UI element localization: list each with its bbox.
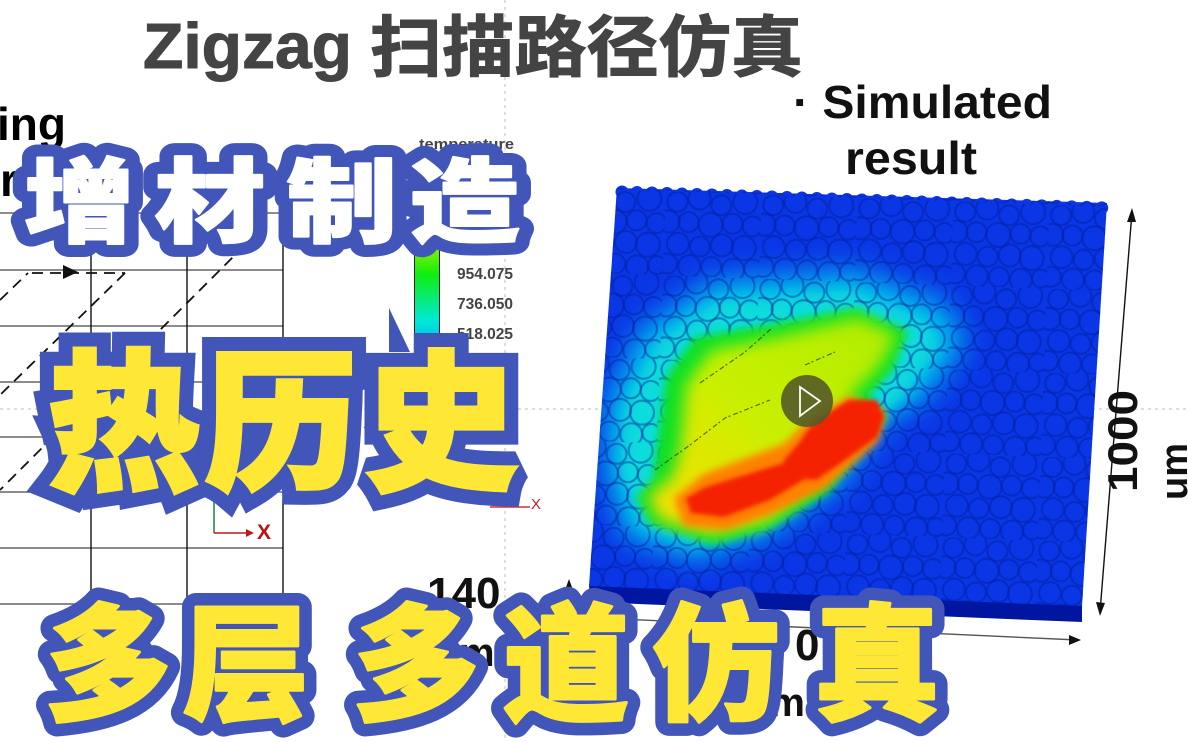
green melt zone [636,308,908,545]
scan path diagram [0,213,283,604]
headline: multi-layer multi-track simulation: 层 [183,565,309,742]
headline: additive manufacturing: 增 [24,129,134,262]
axis: x direction, legend [490,496,541,513]
headline: thermal history: 热 [48,302,200,522]
simulated result heading: result [845,132,977,184]
headline: multi-layer multi-track simulation: 真 [814,565,940,742]
simulated temperature field plate [580,180,1120,622]
title: 扫描路径仿真 [370,11,803,86]
axis: x direction, legend: X [531,496,541,513]
yellow-green zone [648,318,897,534]
headline: thermal history: 历 [205,302,357,522]
headline: multi-layer multi-track simulation [45,565,940,742]
outline spike [389,308,410,352]
temperature legend: 518.025 [457,326,513,343]
temperature legend: 300.000 [457,355,513,372]
headline: multi-layer multi-track simulation: 多 [353,565,479,742]
headline: multi-layer multi-track simulation: 层 [183,565,309,742]
axis: x direction, left: X [257,521,271,544]
headline: thermal history: 热 [48,302,200,522]
headline: additive manufacturing: 制 [287,129,397,262]
headline: multi-layer multi-track simulation: 道 [503,565,629,742]
dimension: bottom width [620,619,1081,725]
scanning pattern heading fragment: rn [0,154,46,206]
headline: thermal history [48,302,517,522]
scanning pattern heading fragment [0,98,66,206]
colour bar [414,240,440,355]
dimension: 140 um height: m [459,631,495,675]
headline: additive manufacturing: 造 [409,129,520,262]
headline: multi-layer multi-track simulation: 仿 [653,565,779,742]
headline: additive manufacturing: 制 [287,129,397,262]
headline: additive manufacturing: 材 [155,129,265,262]
title: Zigzag [143,10,352,82]
headline: additive manufacturing: 造 [409,129,520,262]
dimension: bottom width: um [745,681,805,725]
headline: thermal history: 历 [205,302,357,522]
dimension: bottom width: 0 [795,621,819,670]
axis: x direction, left [214,500,271,544]
headline: additive manufacturing: 材 [155,129,265,262]
headline: multi-layer multi-track simulation: 仿 [653,565,779,742]
headline: multi-layer multi-track simulation: 多 [45,565,171,742]
temperature legend: 736.050 [457,296,513,313]
dimension: 1000 um side: 1000 [1099,390,1146,492]
scalloped powder edge [622,192,1104,208]
dimension: 140 um height: 140 [427,569,500,618]
orange zone [674,396,886,530]
temperature legend: 954.075 [457,266,513,283]
headline: multi-layer multi-track simulation: 多 [353,565,479,742]
headline: additive manufacturing: 增 [24,129,134,262]
headline: additive manufacturing [24,129,520,262]
headline: multi-layer multi-track simulation: 多 [45,565,171,742]
red tail [686,463,820,517]
headline: thermal history: 史 [365,302,517,522]
dimension: 1000 um side [1096,208,1188,616]
red hot zone [686,400,884,517]
title [143,10,803,86]
headline: multi-layer multi-track simulation: 真 [814,565,940,742]
scan direction arrow [63,265,78,279]
headline: multi-layer multi-track simulation: 道 [503,565,629,742]
simulated result heading [793,76,1052,184]
melt track cracks [655,328,835,470]
play button [781,375,833,427]
cyan halo [606,270,966,560]
temperature legend [414,137,514,372]
headline: thermal history: 史 [365,302,517,522]
plate top face [589,188,1107,606]
red blob [784,400,884,480]
dimension: 140 um height [427,569,573,675]
temperature legend: temperature [419,137,514,153]
simulated result heading: · Simulated [793,76,1052,128]
powder particles [580,180,1120,620]
plate side [589,584,1082,622]
